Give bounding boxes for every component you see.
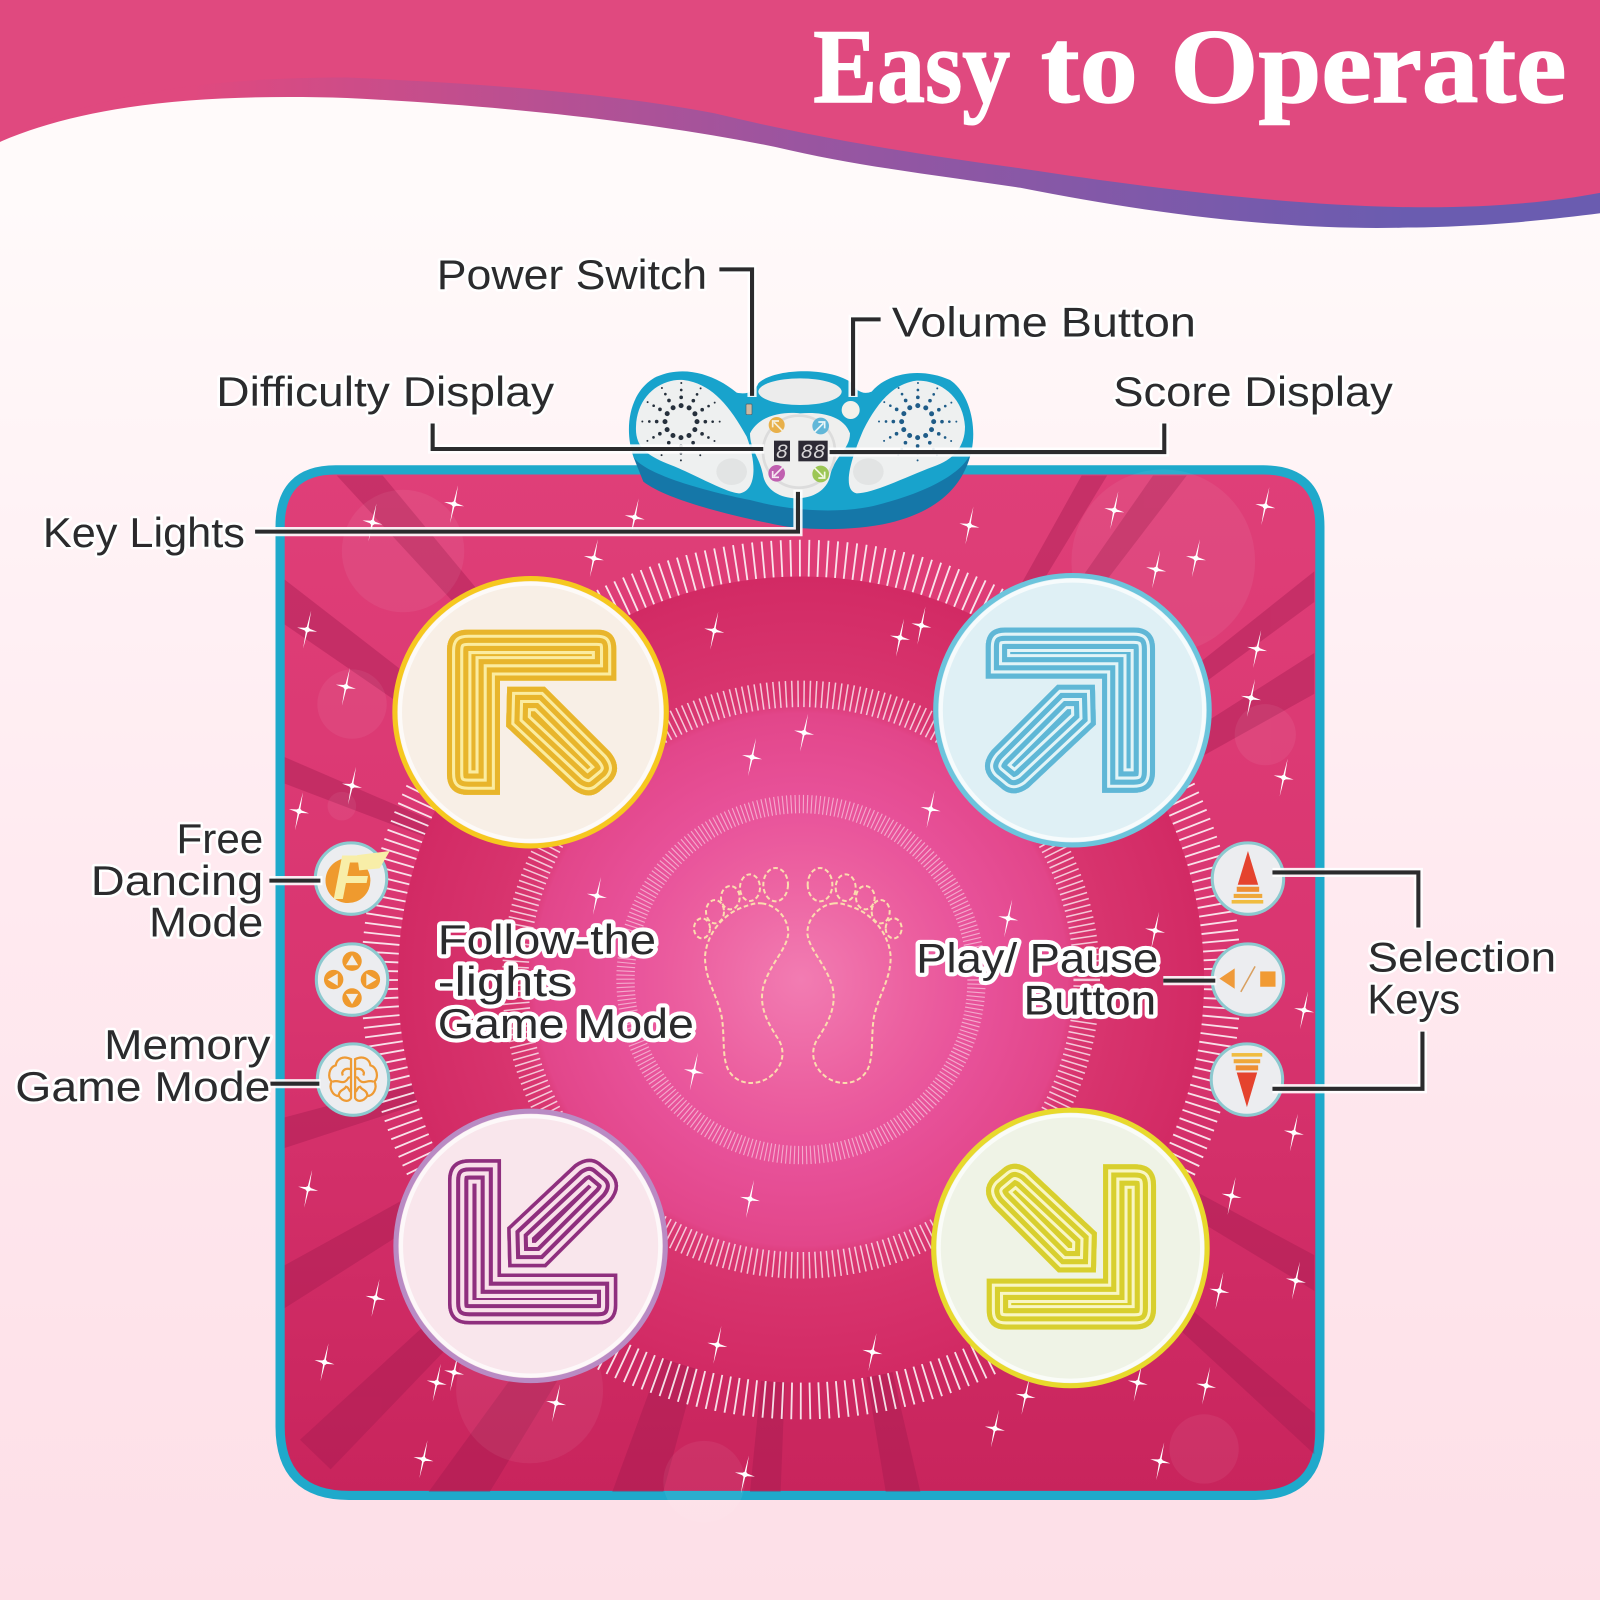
bokeh circles: [317, 469, 1296, 1522]
label: play/pause button: Button: [1023, 976, 1156, 1023]
button: memory game mode: [317, 1044, 389, 1115]
button: play/pause: [1212, 944, 1284, 1015]
label: free dancing mode: [91, 815, 263, 946]
footprints: [694, 868, 902, 1083]
pad: lime down-right arrow: [934, 1110, 1207, 1386]
label: memory game mode: Game Mode: [15, 1063, 270, 1110]
pad: blue up-right arrow: [936, 576, 1209, 845]
label: volume button: Volume Button: [892, 299, 1196, 346]
label: free dancing mode: Free: [177, 815, 263, 862]
label: score display: Score Display: [1113, 368, 1393, 415]
label: selection keys: Keys: [1367, 975, 1460, 1022]
right foot: [807, 868, 902, 1083]
left foot: [694, 868, 788, 1083]
left speaker panel: [636, 380, 753, 493]
centre disc: [398, 577, 1204, 1383]
pad: purple down-left arrow: [396, 1111, 665, 1381]
pad: yellow up-left arrow: [395, 579, 666, 846]
button: free dancing mode: F: [333, 843, 373, 913]
key light: blue: [812, 418, 829, 434]
key light: yellow: [769, 417, 785, 433]
volume button: [842, 401, 860, 419]
label: free dancing mode: Mode: [149, 899, 263, 946]
title: Easy: [813, 7, 1010, 125]
leader lines: [255, 269, 1422, 1089]
key light: green: [812, 466, 829, 482]
power switch: [746, 404, 752, 415]
label: difficulty display: Difficulty Display: [216, 368, 554, 415]
label: play/pause button: Play/ Pause: [916, 934, 1158, 981]
label: memory game mode: [15, 1021, 270, 1110]
label: follow-the-lights game mode: Follow-the: [438, 916, 656, 963]
label: memory game mode: Memory: [104, 1021, 270, 1068]
label: follow-the-lights game mode: [438, 916, 694, 1047]
label: power switch: Power Switch: [437, 251, 707, 298]
keypad panel: [750, 413, 850, 498]
control box shell: [633, 450, 972, 529]
top oval panel: [758, 378, 842, 405]
label: follow-the-lights game mode: Game Mode: [438, 1000, 694, 1047]
label: follow-the-lights game mode: -lights: [438, 958, 572, 1005]
button: down selection key: [1211, 1044, 1283, 1115]
button: free dancing mode: [315, 843, 390, 914]
right speaker panel: [849, 381, 965, 493]
button: follow-the-lights mode: [316, 944, 388, 1015]
button: up selection key: [1212, 843, 1284, 914]
title: to: [1041, 7, 1138, 125]
leader strokes: [255, 269, 1422, 1089]
difficulty LED: 8: [776, 442, 788, 465]
mat rays: [285, 476, 1314, 1492]
control box body: [629, 371, 973, 510]
control box: [629, 371, 973, 529]
title: [813, 7, 1566, 125]
label: key lights: Key Lights: [43, 509, 245, 556]
dance mat: [280, 469, 1320, 1522]
label: free dancing mode: Dancing: [91, 857, 263, 904]
score LED: 88: [801, 442, 825, 465]
title: Operate: [1170, 7, 1566, 125]
label: selection keys: [1367, 933, 1556, 1022]
label: selection keys: Selection: [1367, 933, 1556, 980]
key light: purple: [768, 465, 785, 482]
label: play/pause button: [916, 934, 1158, 1023]
tick rings: [380, 558, 1222, 1401]
mat base: [280, 470, 1320, 1495]
sparkles: [285, 483, 1318, 1496]
leader halos: [255, 269, 1422, 1089]
header banner: [0, 0, 1600, 228]
